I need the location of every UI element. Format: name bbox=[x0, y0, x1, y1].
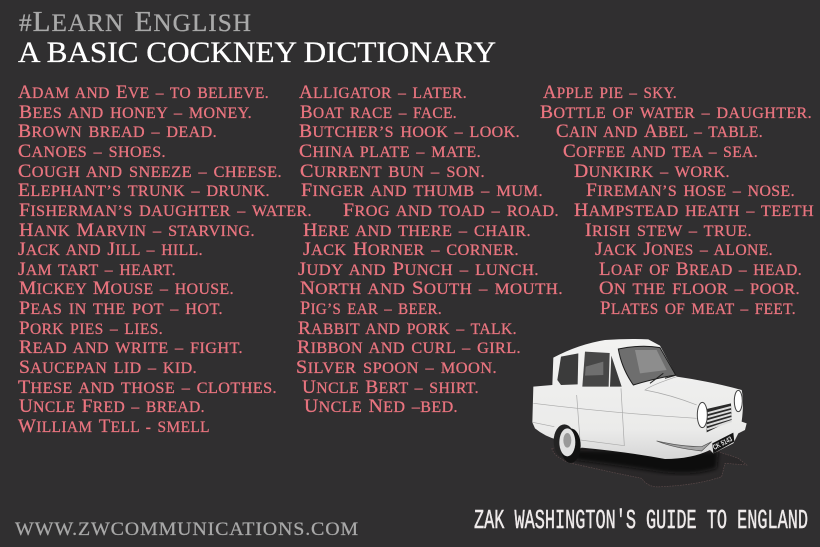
column 1: dictionary entries: MICKEY MOUSE – HOUSE. bbox=[19, 278, 234, 299]
car shadow bbox=[552, 447, 747, 487]
column 2: dictionary entries: UNCLE NED –BED. bbox=[304, 396, 458, 417]
column 1: dictionary entries: ADAM AND EVE – TO BELIEVE. bbox=[18, 82, 269, 103]
car headlights bbox=[697, 390, 742, 428]
column 1: dictionary entries: HANK MARVIN – STARVING. bbox=[19, 220, 255, 241]
column 3: dictionary entries: JACK JONES – ALONE. bbox=[595, 239, 773, 260]
column 1: dictionary entries: PEAS IN THE POT – HOT. bbox=[19, 298, 223, 319]
column 3: dictionary entries bbox=[540, 82, 814, 319]
column 1: dictionary entries: SAUCEPAN LID – KID. bbox=[19, 357, 197, 378]
column 3: dictionary entries: COFFEE AND TEA – SEA. bbox=[563, 141, 758, 162]
column 2: dictionary entries: RIBBON AND CURL – GIRL. bbox=[297, 337, 521, 358]
car body lines bbox=[533, 377, 697, 446]
column 2: dictionary entries: CURRENT BUN – SON. bbox=[300, 161, 485, 182]
title: A BASIC COCKNEY DICTIONARY bbox=[18, 36, 496, 69]
column 1: dictionary entries: BEES AND HONEY – MONEY. bbox=[19, 102, 252, 123]
car windscreen bbox=[618, 346, 676, 385]
car rear window bbox=[557, 353, 578, 385]
column 1: dictionary entries: JACK AND JILL – HILL. bbox=[18, 239, 203, 260]
column 1: dictionary entries: THESE AND THOSE – CLOTHES. bbox=[18, 377, 277, 398]
column 2: dictionary entries bbox=[296, 82, 563, 417]
column 1: dictionary entries: CANOES – SHOES. bbox=[18, 141, 166, 162]
car wipers bbox=[650, 373, 677, 383]
column 1: dictionary entries: FISHERMAN’S DAUGHTER – WATER. bbox=[19, 200, 312, 221]
column 2: dictionary entries: JUDY AND PUNCH – LUNCH. bbox=[298, 259, 539, 280]
column 2: dictionary entries: JACK HORNER – CORNER. bbox=[303, 239, 519, 260]
column 3: dictionary entries: BOTTLE OF WATER – DAUGHTER. bbox=[540, 102, 812, 123]
column 2: dictionary entries: BUTCHER’S HOOK – LOOK. bbox=[299, 121, 520, 142]
column 1: dictionary entries: UNCLE FRED – BREAD. bbox=[19, 396, 205, 417]
column 3: dictionary entries: HAMPSTEAD HEATH – TEETH bbox=[574, 200, 814, 221]
column 2: dictionary entries: HERE AND THERE – CHAIR. bbox=[303, 220, 531, 241]
column 3: dictionary entries: PLATES OF MEAT – FEET. bbox=[600, 298, 796, 319]
column 3: dictionary entries: LOAF OF BREAD – HEAD. bbox=[599, 259, 802, 280]
column 2: dictionary entries: NORTH AND SOUTH – MOUTH. bbox=[300, 278, 563, 299]
column 1: dictionary entries: READ AND WRITE – FIGHT. bbox=[19, 337, 243, 358]
car number plate bbox=[711, 433, 734, 453]
column 3: dictionary entries: APPLE PIE – SKY. bbox=[543, 82, 677, 103]
car side window bbox=[582, 352, 610, 387]
car rear wheel bbox=[554, 424, 581, 463]
car front bumper bbox=[657, 441, 712, 451]
car number plate: CK 5143 bbox=[711, 434, 734, 452]
column 2: dictionary entries: SILVER SPOON – MOON. bbox=[296, 357, 497, 378]
car body bbox=[532, 339, 747, 459]
column 1: dictionary entries: PORK PIES – LIES. bbox=[19, 318, 163, 339]
column 2: dictionary entries: RABBIT AND PORK – TALK. bbox=[298, 318, 517, 339]
column 3: dictionary entries: FIREMAN’S HOSE – NOSE. bbox=[586, 180, 795, 201]
column 2: dictionary entries: ALLIGATOR – LATER. bbox=[299, 82, 467, 103]
column 1: dictionary entries: COUGH AND SNEEZE – CHEESE. bbox=[18, 161, 282, 182]
column 1: dictionary entries: BROWN BREAD – DEAD. bbox=[18, 121, 217, 142]
column 2: dictionary entries: CHINA PLATE – MATE. bbox=[299, 141, 481, 162]
column 3: dictionary entries: DUNKIRK – WORK. bbox=[574, 161, 730, 182]
column 1: dictionary entries: WILLIAM TELL - SMELL bbox=[18, 416, 210, 437]
column 3: dictionary entries: IRISH STEW – TRUE. bbox=[585, 220, 752, 241]
column 1: dictionary entries: ELEPHANT’S TRUNK – DRUNK. bbox=[18, 180, 270, 201]
subtitle: #Learn English: #LEARN ENGLISH bbox=[19, 6, 252, 38]
column 3: dictionary entries: CAIN AND ABEL – TABLE. bbox=[556, 121, 763, 142]
column 2: dictionary entries: FINGER AND THUMB – MUM. bbox=[301, 180, 543, 201]
car quarter window bbox=[610, 356, 622, 387]
column 2: dictionary entries: BOAT RACE – FACE. bbox=[300, 102, 457, 123]
column 2: dictionary entries: PIG’S EAR – BEER. bbox=[300, 298, 442, 319]
website url: WWW.ZWCOMMUNICATIONS.COM bbox=[15, 519, 359, 540]
column 2: dictionary entries: UNCLE BERT – SHIRT. bbox=[302, 377, 479, 398]
illustration: white three-wheeler car bbox=[532, 339, 747, 487]
column 1: dictionary entries bbox=[18, 82, 312, 437]
column 3: dictionary entries: ON THE FLOOR – POOR. bbox=[599, 278, 800, 299]
column 1: dictionary entries: JAM TART – HEART. bbox=[18, 259, 176, 280]
column 2: dictionary entries: FROG AND TOAD – ROAD. bbox=[343, 200, 559, 221]
car grille bbox=[707, 403, 732, 432]
